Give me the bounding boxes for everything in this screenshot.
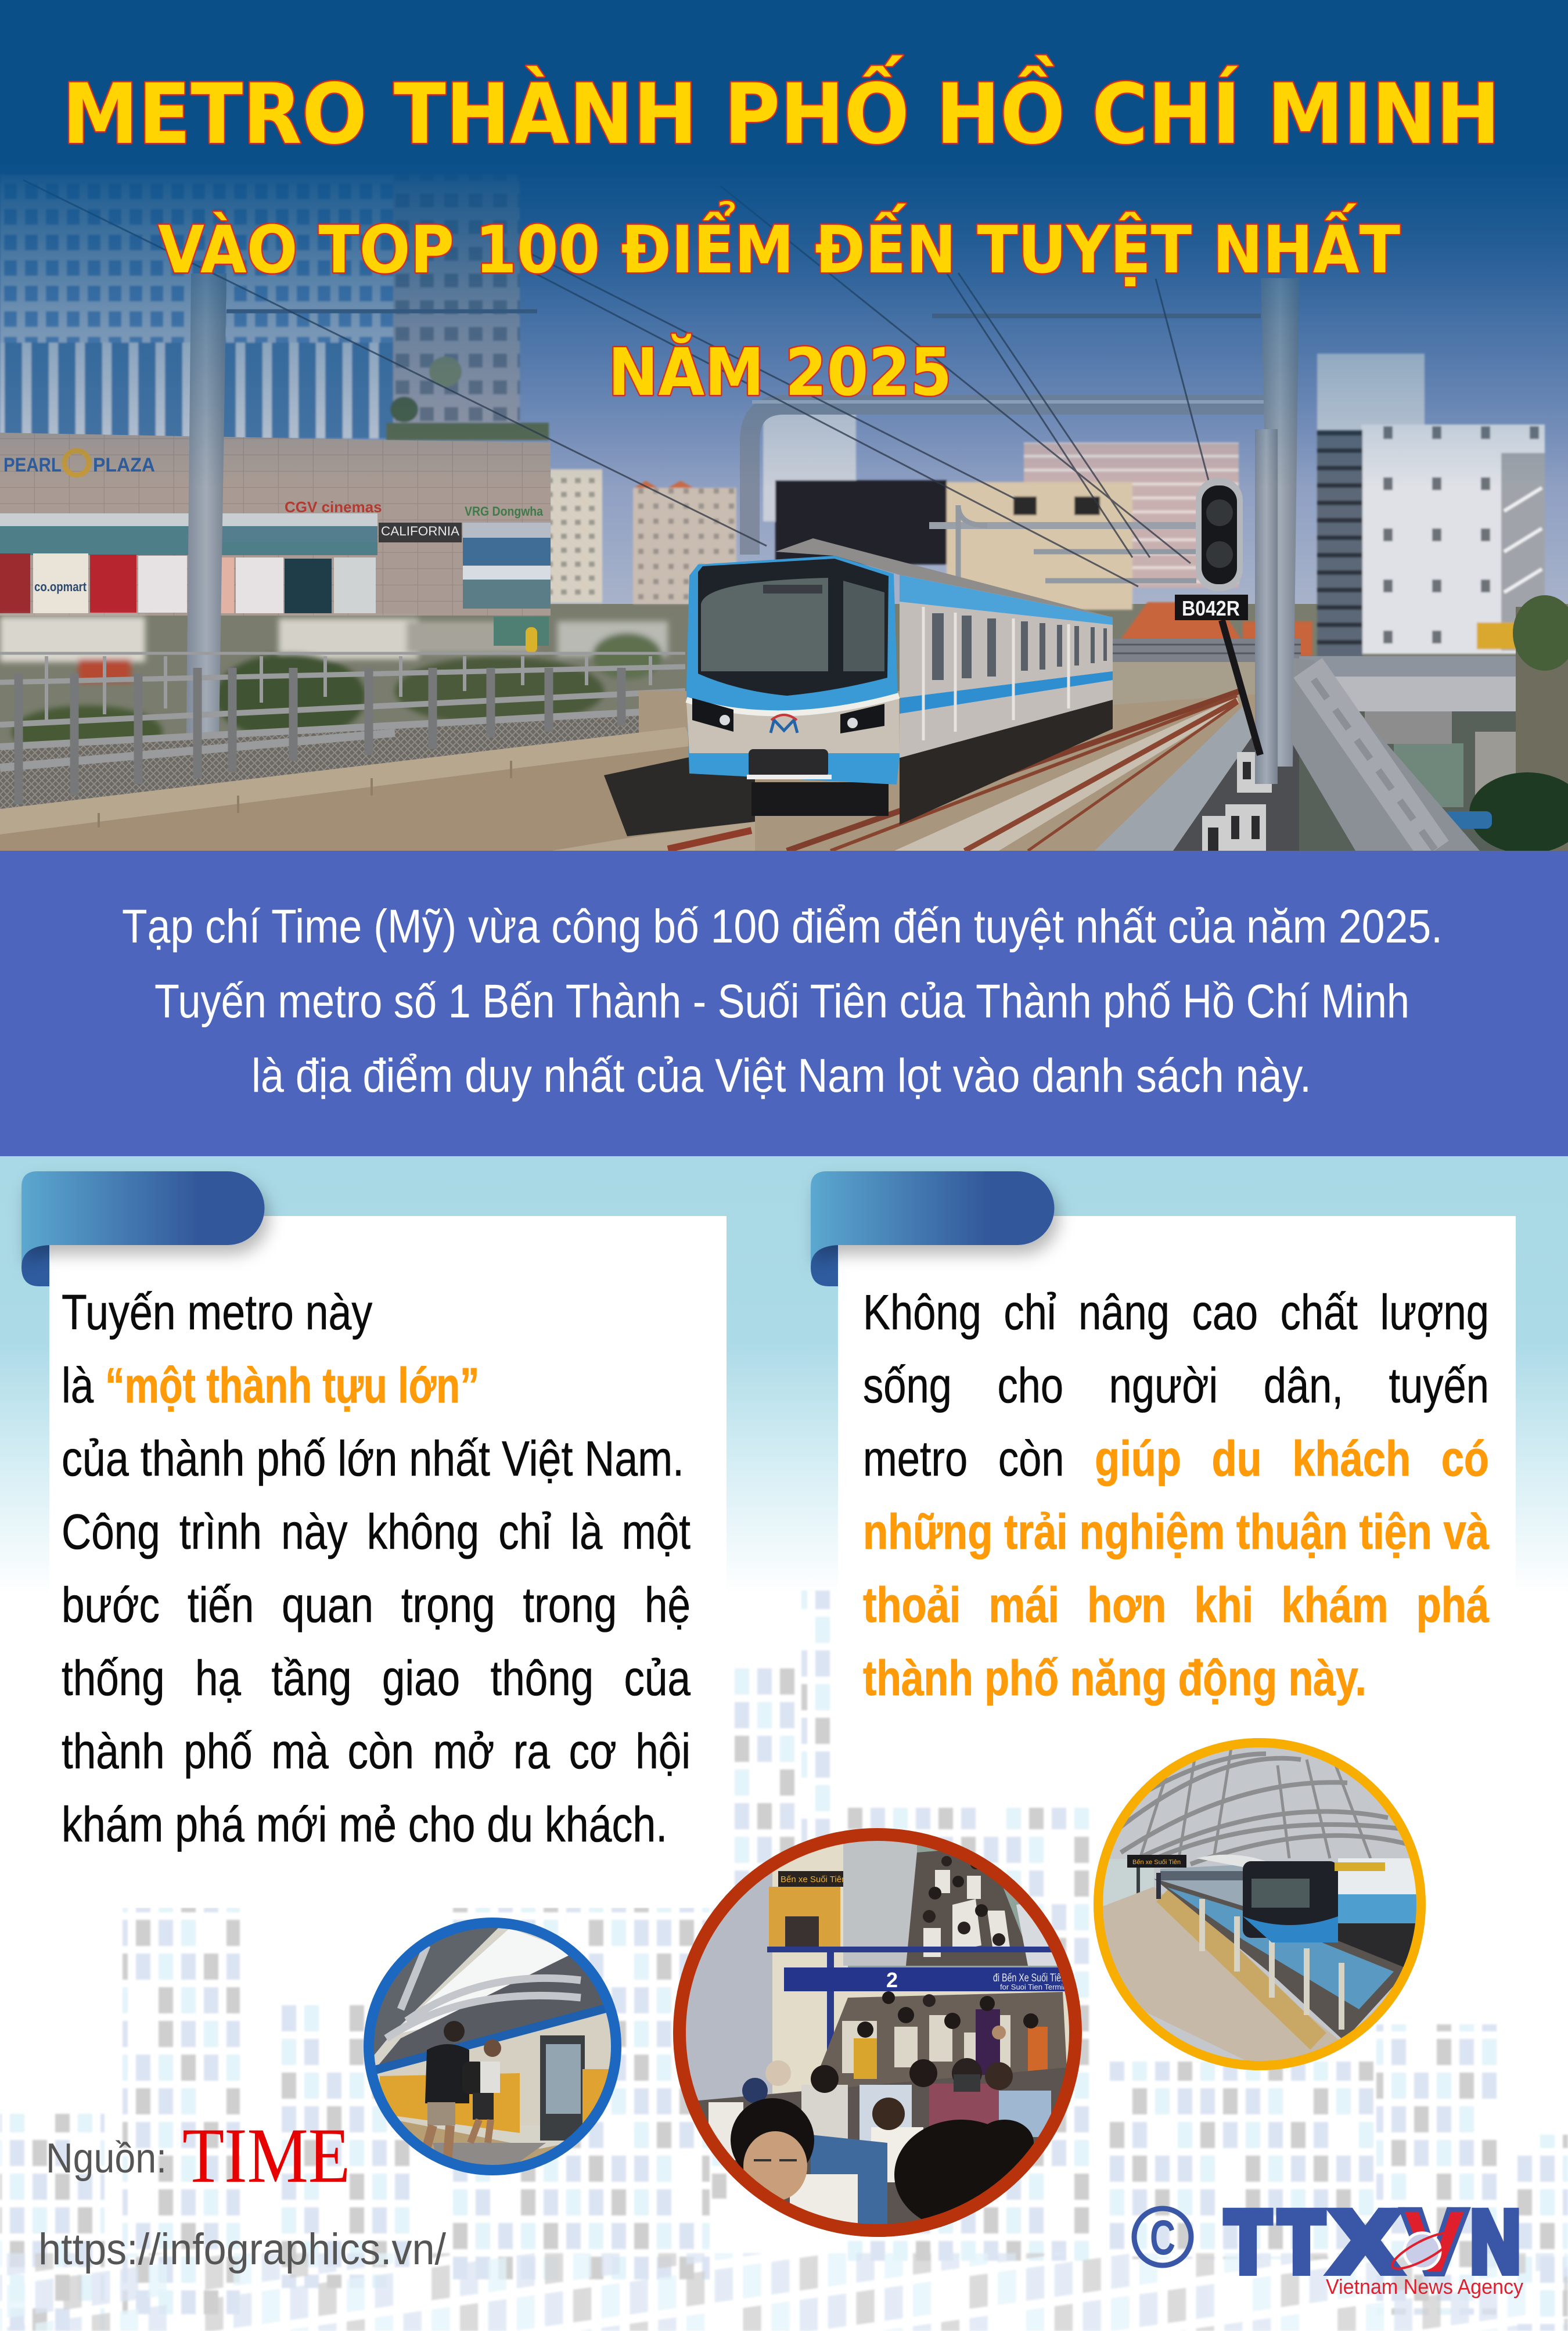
train side [900, 575, 1113, 758]
title line 2: VÀO TOP 100 ĐIỂM ĐẾN TUYỆT NHẤT [158, 201, 1400, 288]
photo sign: B042R [1175, 595, 1260, 755]
panel: left text card [21, 1171, 727, 1908]
photo: man with backpack [462, 2039, 501, 2143]
photo: pole left [186, 274, 226, 775]
text block: right panel: thành phố năng động này. [863, 1651, 1366, 1706]
photo: shopping podium [0, 433, 551, 617]
header to photo fade [0, 163, 1568, 488]
photo: shopping podium: CGV cinemas [285, 498, 382, 516]
photo sign: Pearl Plaza: PLAZA [93, 454, 155, 476]
photo: train front [1160, 1855, 1338, 1942]
text block: right panel: thoải mái hơn khi khám phá [863, 1578, 1489, 1633]
circle border: blue [369, 1923, 616, 2170]
photo: concrete walkway [0, 727, 755, 851]
logo: TTXVN: X [1331, 2193, 1400, 2290]
photo sign: platform 2: đi Bến Xe Suối Tiên [993, 1972, 1066, 1984]
photo: low rooftops and trees [0, 616, 697, 767]
photo circle: passengers on platform [360, 1916, 627, 2178]
photo: station signs [1127, 1855, 1385, 1871]
photo: left office tower [0, 174, 549, 440]
text block: left panel: khám phá mới mẻ cho du khách. [62, 1797, 667, 1852]
photo sign: platform 2: 2 [886, 1968, 898, 1992]
photo: track base and far wall [639, 639, 1301, 851]
photo: shopping podium: CALIFORNIA [381, 524, 459, 538]
text block: right panel: metro còn giúp du khách có [863, 1431, 1489, 1487]
logo: TTXVN: T [1225, 2193, 1271, 2290]
photo: track bed and rails [668, 691, 1301, 851]
text block: right panel: sống cho người dân, tuyến [863, 1358, 1489, 1413]
source logo: TIME: TIME [182, 2113, 350, 2199]
text block: left panel: Tuyến metro này [62, 1285, 372, 1340]
title line 3: NĂM 2025 [608, 334, 952, 411]
photo: metro train [686, 538, 1113, 825]
logo: TTXVN: V [1404, 2193, 1465, 2290]
title [62, 55, 1500, 411]
text block: left panel: “một thành tựu lớn” [105, 1358, 479, 1413]
photo: platform floor [1092, 1887, 1344, 2073]
train cab [686, 556, 900, 785]
lower background gradient [0, 1156, 1568, 1595]
photo sign: Pearl Plaza [3, 451, 155, 476]
photo circle: crowd in station [668, 1823, 1086, 2242]
header band [0, 0, 1568, 186]
photo sign: B042R: B042R [1182, 596, 1240, 620]
sky [0, 186, 1568, 604]
intro text: là địa điểm duy nhất của Việt Nam lọt vào danh sách này. [251, 1049, 1311, 1102]
logo caption: Vietnam News Agency [1326, 2275, 1523, 2298]
skyline background pattern [0, 1591, 1568, 2331]
photo: distant buildings [550, 354, 1545, 656]
text block: left panel: Công trình này không chỉ là một [62, 1505, 691, 1560]
photo circle: empty station platform [1092, 1736, 1429, 2073]
logo globe [1388, 2227, 1456, 2275]
circle border: red [679, 1834, 1076, 2231]
photo sign: Pearl Plaza: PEARL [3, 454, 62, 476]
text block: left panel: bước tiến quan trọng trong hệ [62, 1578, 691, 1633]
photo: right parapet [1290, 658, 1480, 851]
photo: front crowd [679, 2058, 1080, 2242]
photo sign: platform 2 [784, 1967, 1073, 1992]
photo: signal [1196, 478, 1243, 591]
intro band [0, 851, 1568, 1156]
photo: upper crowd [906, 1847, 1063, 1966]
text block: left panel [62, 1285, 691, 1852]
photo sign: platform 2: for Suoi Tien Terminal [1000, 1983, 1073, 1991]
text block: left panel: thành phố mà còn mở ra cơ hội [62, 1724, 691, 1779]
text block: right panel [863, 1285, 1490, 1706]
logo: TTXVN [1225, 2193, 1523, 2298]
photo: station roof [1103, 1748, 1417, 1864]
photo: shopping podium: co.opmart [34, 580, 87, 594]
icon: copyright: C [1150, 2210, 1175, 2265]
logo: TTXVN: T [1279, 2193, 1324, 2290]
ribbon: right [811, 1171, 1055, 1286]
ribbon: left [21, 1171, 265, 1286]
text block: left panel: thống hạ tầng giao thông của [62, 1651, 691, 1706]
panel: right text card [811, 1171, 1516, 1806]
text block: left panel: là [62, 1358, 93, 1413]
train under-frame [900, 700, 1113, 825]
icon: copyright [1134, 2208, 1191, 2265]
circle border: yellow [1098, 1743, 1421, 2066]
photo: middle crowd [801, 1991, 1069, 2114]
photo: station signs: Bến xe Suối Tiên [1132, 1859, 1181, 1866]
photo: overpass [1299, 595, 1568, 854]
photo: platform screen doors [1154, 1879, 1409, 2041]
website link: https://infographics.vn/ [38, 2225, 447, 2274]
source label: Nguồn: [46, 2135, 167, 2182]
train logo [771, 715, 797, 733]
text block: right panel: những trải nghiệm thuận tiện và [863, 1505, 1489, 1560]
photo: overhead wires [23, 180, 1220, 587]
hero photo: metro train on elevated line [0, 163, 1568, 854]
train roof [775, 538, 1113, 617]
text block: right panel: Không chỉ nâng cao chất lượng [863, 1285, 1489, 1340]
logo: TTXVN: N [1470, 2193, 1520, 2290]
photo: shopping podium: VRG Dongwha [465, 504, 544, 519]
photo: man in black jacket [424, 2021, 469, 2163]
text block: left panel: của thành phố lớn nhất Việt Nam. [62, 1431, 684, 1487]
intro text [122, 900, 1443, 1102]
photo: gantry and poles [226, 278, 1299, 784]
photo: track-side railing [0, 653, 685, 813]
photo circle: crowd in station: Bến xe Suối Tiên [781, 1875, 846, 1884]
